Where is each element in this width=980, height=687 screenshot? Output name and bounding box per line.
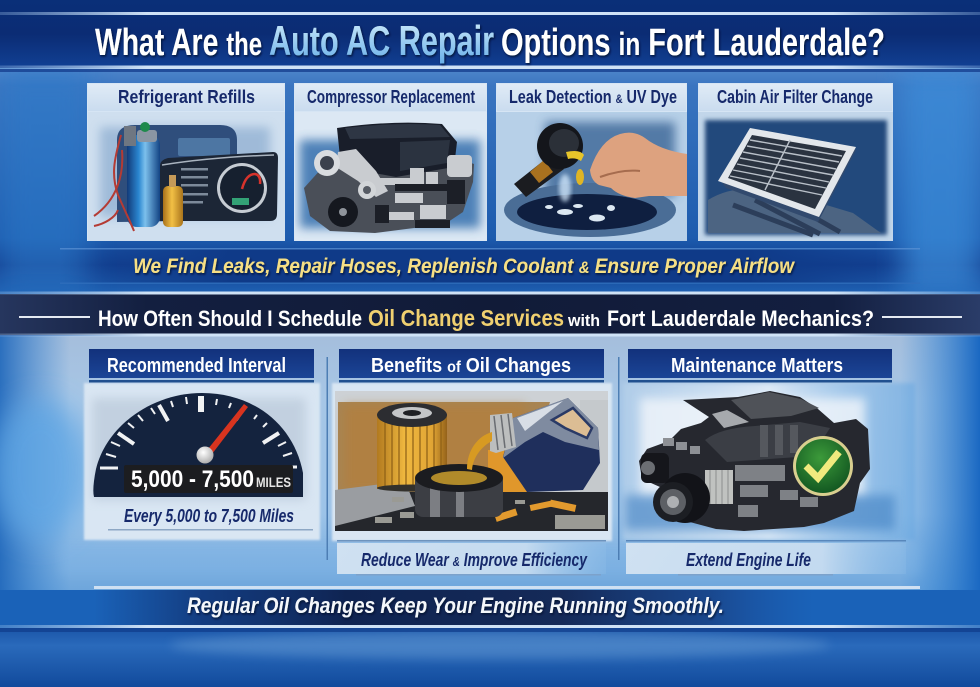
gauge (92, 393, 306, 500)
panel heading (89, 349, 314, 382)
panel: benefits of oil changes (332, 349, 612, 576)
card heading: Refrigerant Refills (118, 86, 255, 107)
card heading: Leak Detection & UV Dye (509, 87, 677, 107)
card heading (88, 84, 284, 111)
panel: recommended interval (84, 349, 320, 540)
card heading (295, 84, 486, 111)
title (95, 17, 885, 64)
panel heading: Recommended Interval (107, 355, 286, 377)
engine block (304, 156, 474, 233)
section heading: Fort Lauderdale Mechanics? (607, 306, 874, 331)
illustration: refrigerant cylinders and gauge (91, 118, 279, 232)
section heading: with (567, 311, 600, 330)
panel heading (628, 349, 892, 382)
title band (0, 0, 980, 72)
panel heading: Maintenance Matters (671, 355, 843, 377)
flashlight (514, 123, 583, 197)
divider (326, 357, 328, 560)
oil cap (415, 464, 503, 517)
caption: Every 5,000 to 7,500 Miles (124, 506, 294, 526)
title: Options in Fort Lauderdale? (501, 22, 885, 64)
gauge dial (217, 163, 267, 213)
oil filter (377, 403, 447, 492)
panel: refrigerant refills (87, 83, 285, 241)
gauge needle (208, 404, 248, 454)
pulleys (660, 473, 710, 523)
title: Auto AC Repair (269, 17, 494, 64)
section heading: Oil Change Services (368, 305, 564, 331)
section heading: How Often Should I Schedule (98, 306, 362, 331)
gauge ticks (100, 396, 297, 468)
section band (0, 292, 980, 336)
panel: maintenance matters (623, 349, 915, 576)
tagline band (60, 248, 920, 284)
illustration: UV dye and hand (496, 112, 687, 241)
illustration: oil filter and jug (335, 391, 610, 531)
card heading: Compressor Replacement (307, 87, 475, 107)
panel heading (339, 349, 604, 382)
card heading (699, 84, 892, 111)
divider (618, 357, 620, 560)
caption: Reduce Wear & Improve Efficiency (361, 550, 588, 570)
mileage readout: MILES (256, 474, 291, 490)
section heading (98, 305, 874, 331)
closing line: Regular Oil Changes Keep Your Engine Running Smoothly. (187, 593, 724, 618)
card heading (497, 84, 686, 111)
card heading: Cabin Air Filter Change (717, 87, 873, 107)
caption: Extend Engine Life (686, 550, 811, 570)
mileage readout: 5,000 - 7,500 (131, 466, 254, 493)
bottom band (0, 586, 980, 632)
engine body (639, 391, 870, 531)
check badge (793, 436, 853, 496)
illustration: cabin air filter (698, 112, 893, 241)
title: What Are the (95, 22, 262, 64)
panel heading: Benefits of Oil Changes (371, 355, 571, 377)
panel: leak detection (496, 83, 687, 241)
illustration: compressor engine (295, 122, 486, 234)
illustration: engine with check mark (625, 391, 895, 531)
oil jug (467, 398, 600, 492)
hand (590, 133, 687, 198)
panel: cabin air filter (698, 83, 893, 241)
yellow tagline: We Find Leaks, Repair Hoses, Replenish Coolant & Ensure Proper Airflow (133, 254, 795, 278)
panel: compressor replacement (294, 83, 487, 241)
